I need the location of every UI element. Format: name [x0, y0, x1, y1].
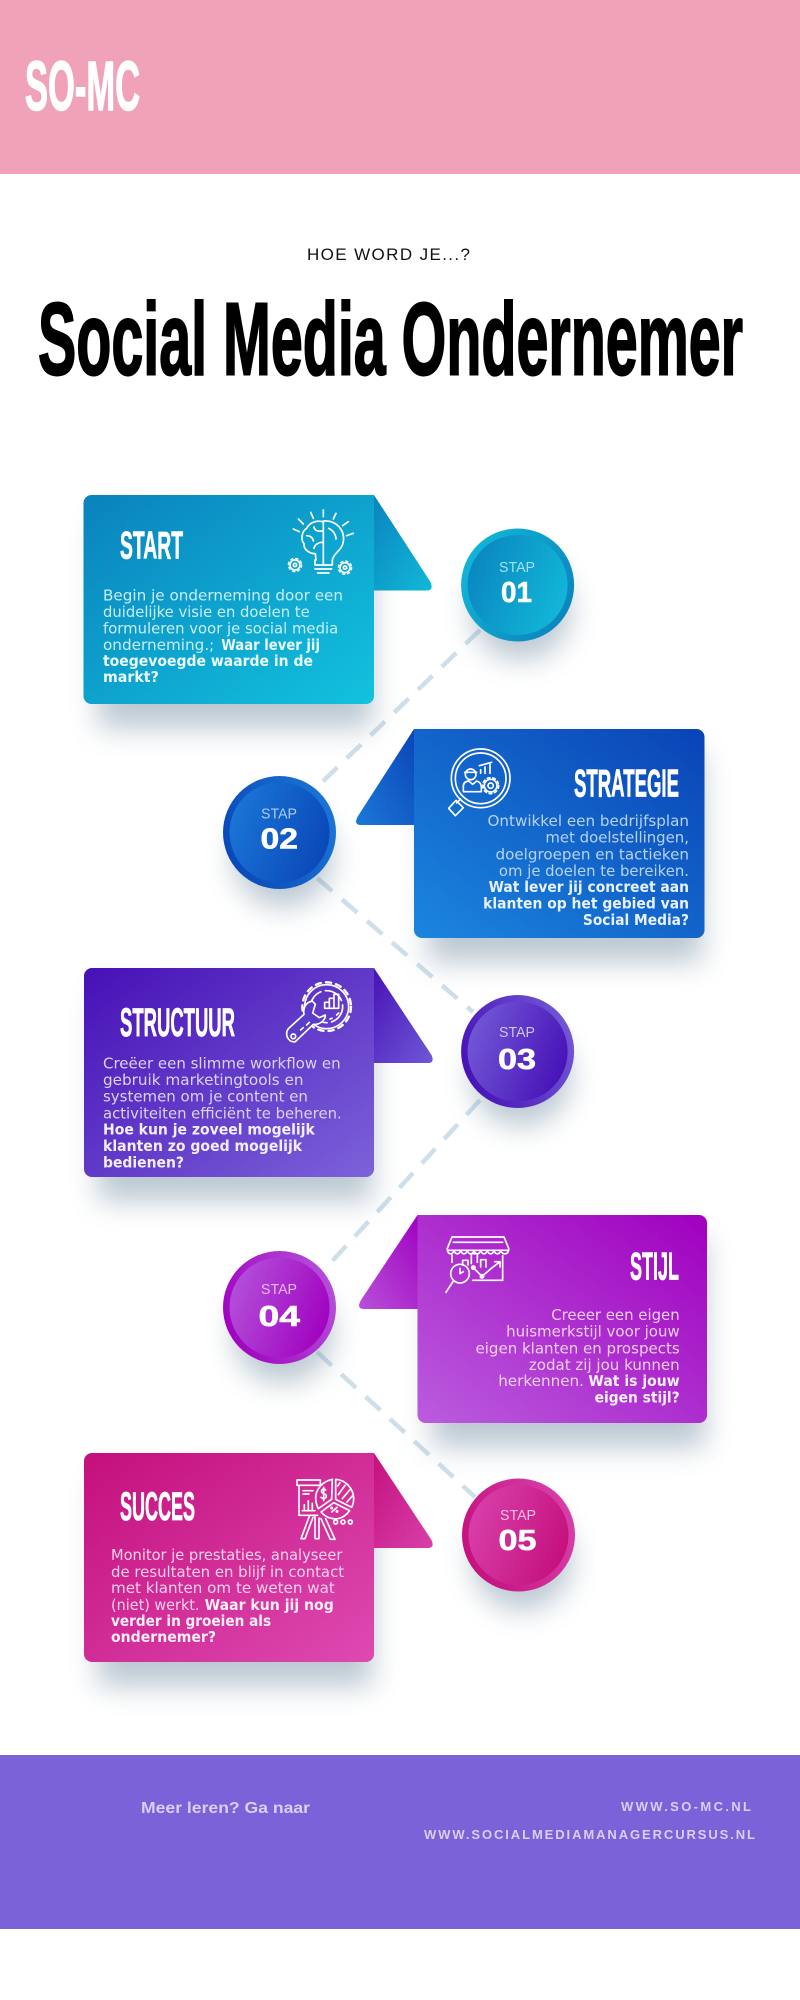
text block: strategie: om je doelen te bereiken. — [499, 862, 689, 880]
text block: start: Begin je onderneming door een — [103, 587, 343, 605]
panel: stijl — [359, 1215, 707, 1423]
footer link: social media manager cursus: WWW.SOCIALMEDIAMANAGERCURSUS.NL — [424, 1827, 755, 1842]
step badge 02 — [223, 776, 336, 889]
panel: structuur: STRUCTUUR — [120, 1001, 235, 1045]
step badge 02: 02 — [260, 824, 298, 856]
step badge 02: STAP — [261, 806, 297, 822]
text block: strategie — [483, 812, 689, 929]
text block: succes: met klanten om te weten wat — [111, 1579, 335, 1597]
step badge 04: STAP — [261, 1282, 297, 1298]
text block: strategie: doelgroepen en tactieken — [496, 845, 689, 863]
text block: succes — [111, 1546, 344, 1646]
text block: stijl: herkennen. — [498, 1372, 584, 1390]
text block: strategie: Wat lever jij concreet aan — [489, 878, 689, 896]
header band — [0, 0, 800, 174]
text block: start: formuleren voor je social media — [103, 619, 338, 637]
step badge 04: 04 — [258, 1301, 300, 1333]
text block: structuur: gebruik marketingtools en — [103, 1071, 304, 1089]
text block: start — [103, 587, 343, 686]
text block: structuur: Creëer een slimme workflow en — [103, 1055, 341, 1073]
text block: structuur: systemen om je content en — [103, 1088, 308, 1106]
text block: start: onderneming.; — [103, 636, 214, 654]
icon: shop with chart and magnifier — [446, 1237, 509, 1292]
step badge 01 — [461, 528, 574, 642]
panel: start — [84, 495, 432, 704]
text block: strategie: met doelstellingen, — [545, 828, 689, 846]
text block: structuur: activiteiten efficiënt te beheren. — [103, 1104, 342, 1122]
icon: magnifier with person and gear — [449, 749, 510, 816]
panel: strategie — [356, 729, 704, 938]
step badge 01: 01 — [501, 577, 532, 609]
text block: structuur: klanten zo goed mogelijk — [103, 1137, 303, 1155]
kicker: hoe word je: HOE WORD JE...? — [307, 245, 470, 264]
text block: succes: verder in groeien als — [111, 1612, 271, 1630]
step badge 01: STAP — [499, 560, 535, 576]
icon: brain light bulb — [288, 510, 353, 574]
step badge 03: STAP — [499, 1025, 535, 1041]
text block: start: Waar lever jij — [221, 636, 320, 654]
text block: stijl: Creeer een eigen — [551, 1306, 680, 1324]
text block: structuur — [103, 1055, 342, 1171]
panel: succes — [84, 1453, 433, 1662]
text block: structuur: Hoe kun je zoveel mogelijk — [103, 1120, 316, 1138]
text block: strategie: Social Media? — [583, 911, 689, 929]
footer band — [0, 1755, 800, 1929]
step badge 03: 03 — [498, 1044, 536, 1076]
text block: stijl: Wat is jouw — [588, 1372, 680, 1390]
footer link: so-mc: WWW.SO-MC.NL — [621, 1799, 751, 1814]
text block: succes: Waar kun jij nog — [205, 1596, 334, 1614]
panel: start: START — [120, 524, 183, 568]
panel: succes: SUCCES — [120, 1485, 195, 1529]
text block: succes: Monitor je prestaties, analyseer — [111, 1546, 343, 1564]
icon: wrench and gear — [287, 982, 351, 1042]
text block: stijl: zodat zij jou kunnen — [529, 1356, 680, 1374]
icon: presentation board with pie chart — [297, 1479, 354, 1539]
text block: strategie: Ontwikkel een bedrijfsplan — [488, 812, 689, 830]
panel: structuur — [84, 968, 433, 1177]
text block: succes: de resultaten en blijf in contact — [111, 1563, 344, 1581]
panel: strategie: STRATEGIE — [574, 762, 679, 806]
step badge 05 — [462, 1478, 575, 1592]
text block: start: toegevoegde waarde in de — [103, 652, 313, 670]
step badge 03 — [461, 995, 574, 1108]
panel: stijl: STIJL — [630, 1246, 679, 1288]
text block: stijl: eigen klanten en prospects — [476, 1339, 680, 1357]
text block: succes: (niet) werkt. — [111, 1596, 200, 1614]
footer call to action: Meer leren? Ga naar — [141, 1800, 310, 1817]
step badge 04 — [223, 1251, 336, 1364]
text block: stijl: huismerkstijl voor jouw — [506, 1323, 680, 1341]
text block: stijl — [476, 1306, 680, 1406]
text block: start: duidelijke visie en doelen te — [103, 603, 310, 621]
step badge 05: 05 — [498, 1525, 536, 1557]
text block: structuur: bedienen? — [103, 1153, 184, 1171]
header band: SO-MC — [25, 47, 140, 125]
text block: succes: ondernemer? — [111, 1628, 216, 1646]
text block: stijl: eigen stijl? — [595, 1388, 680, 1406]
text block: start: markt? — [103, 668, 159, 686]
step badge 05: STAP — [500, 1508, 536, 1524]
text block: strategie: klanten op het gebied van — [483, 895, 689, 913]
